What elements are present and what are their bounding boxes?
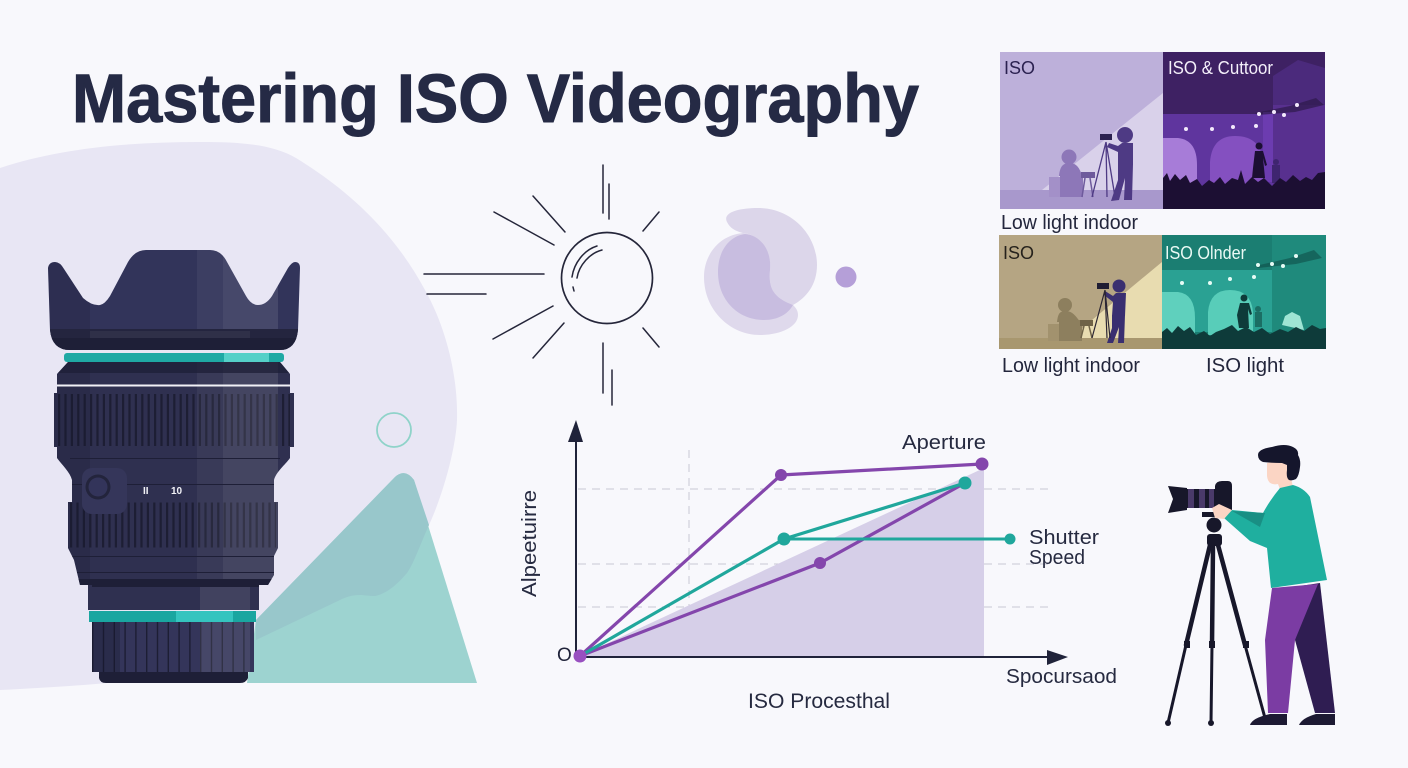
panel heading: ISO purple: ISO [1004,58,1035,78]
panel: low light indoor warm [999,235,1162,349]
top teal band [64,353,284,362]
illustration: camera lens [48,250,300,683]
shoes [1250,714,1335,725]
icon: sun with rays [424,165,659,405]
performers and crowd [1163,142,1325,209]
panel heading: ISO teal: ISO Olnder [1165,243,1246,263]
performers and crowd teal [1162,294,1326,349]
lens switch knob [82,468,127,514]
zoom ring ribs [70,502,276,548]
chart: ISO relationship line chart [519,420,1117,713]
panel: concert teal [1162,235,1326,349]
icon: lavender blob [704,208,817,335]
lens hood [48,250,300,350]
caption: low light indoor warm: Low light indoor [1002,355,1140,377]
second purple series [580,483,965,656]
dot [836,266,856,288]
panel heading: ISO warm: ISO [1003,243,1034,263]
label shutter speed: Shutter [1029,527,1099,549]
label x axis end: Spocursaod [1006,666,1117,688]
title: Mastering ISO Videography [72,60,919,137]
origin point [574,650,586,662]
tripod head [1165,512,1249,726]
axes [568,420,1068,665]
label shutter speed: Speed [1029,547,1085,569]
aperture series [580,458,988,656]
decorative teal ring [377,413,411,447]
tripod [1168,545,1265,723]
illustration: videographer on tripod [1165,445,1335,726]
white line [57,384,290,386]
label y axis: Alpeetuirre [519,490,541,597]
hair [1258,445,1300,480]
focus ring ribs [58,394,290,446]
neck and face [1267,460,1293,492]
seated operator and desk warm [1048,298,1093,341]
camera operator warm [1092,280,1126,343]
caption: ISO light: ISO light [1206,355,1284,377]
lower teal band [89,611,256,622]
label aperture: Aperture [902,432,986,454]
panel: outdoor concert purple [1163,52,1325,209]
label x axis: ISO Procesthal [748,690,890,713]
teal sweater [1224,485,1327,588]
shaded area [580,468,984,657]
panel: low light indoor purple [1000,52,1163,209]
front ribbed ring [92,622,254,672]
stage lights teal [1180,254,1298,285]
lens markings number: 10 [171,486,183,497]
camera [1168,481,1232,513]
label origin: O [557,645,572,666]
seated operator and desk [1049,150,1095,197]
caption: low light indoor: Low light indoor [1001,212,1138,234]
lens foot [99,672,248,683]
facet shading [48,250,298,672]
shutter speed series [580,476,1016,656]
camera operator [1092,127,1133,201]
stage lights [1184,103,1299,131]
pants [1265,583,1335,713]
hand [1212,504,1232,519]
gridlines [578,450,1050,656]
lens markings: II [143,486,149,497]
lens barrel [54,362,294,610]
teal triangle backdrop [247,473,477,683]
panel heading: ISO outdoor: ISO & Cuttoor [1168,58,1273,78]
background lavender blob [0,142,457,690]
